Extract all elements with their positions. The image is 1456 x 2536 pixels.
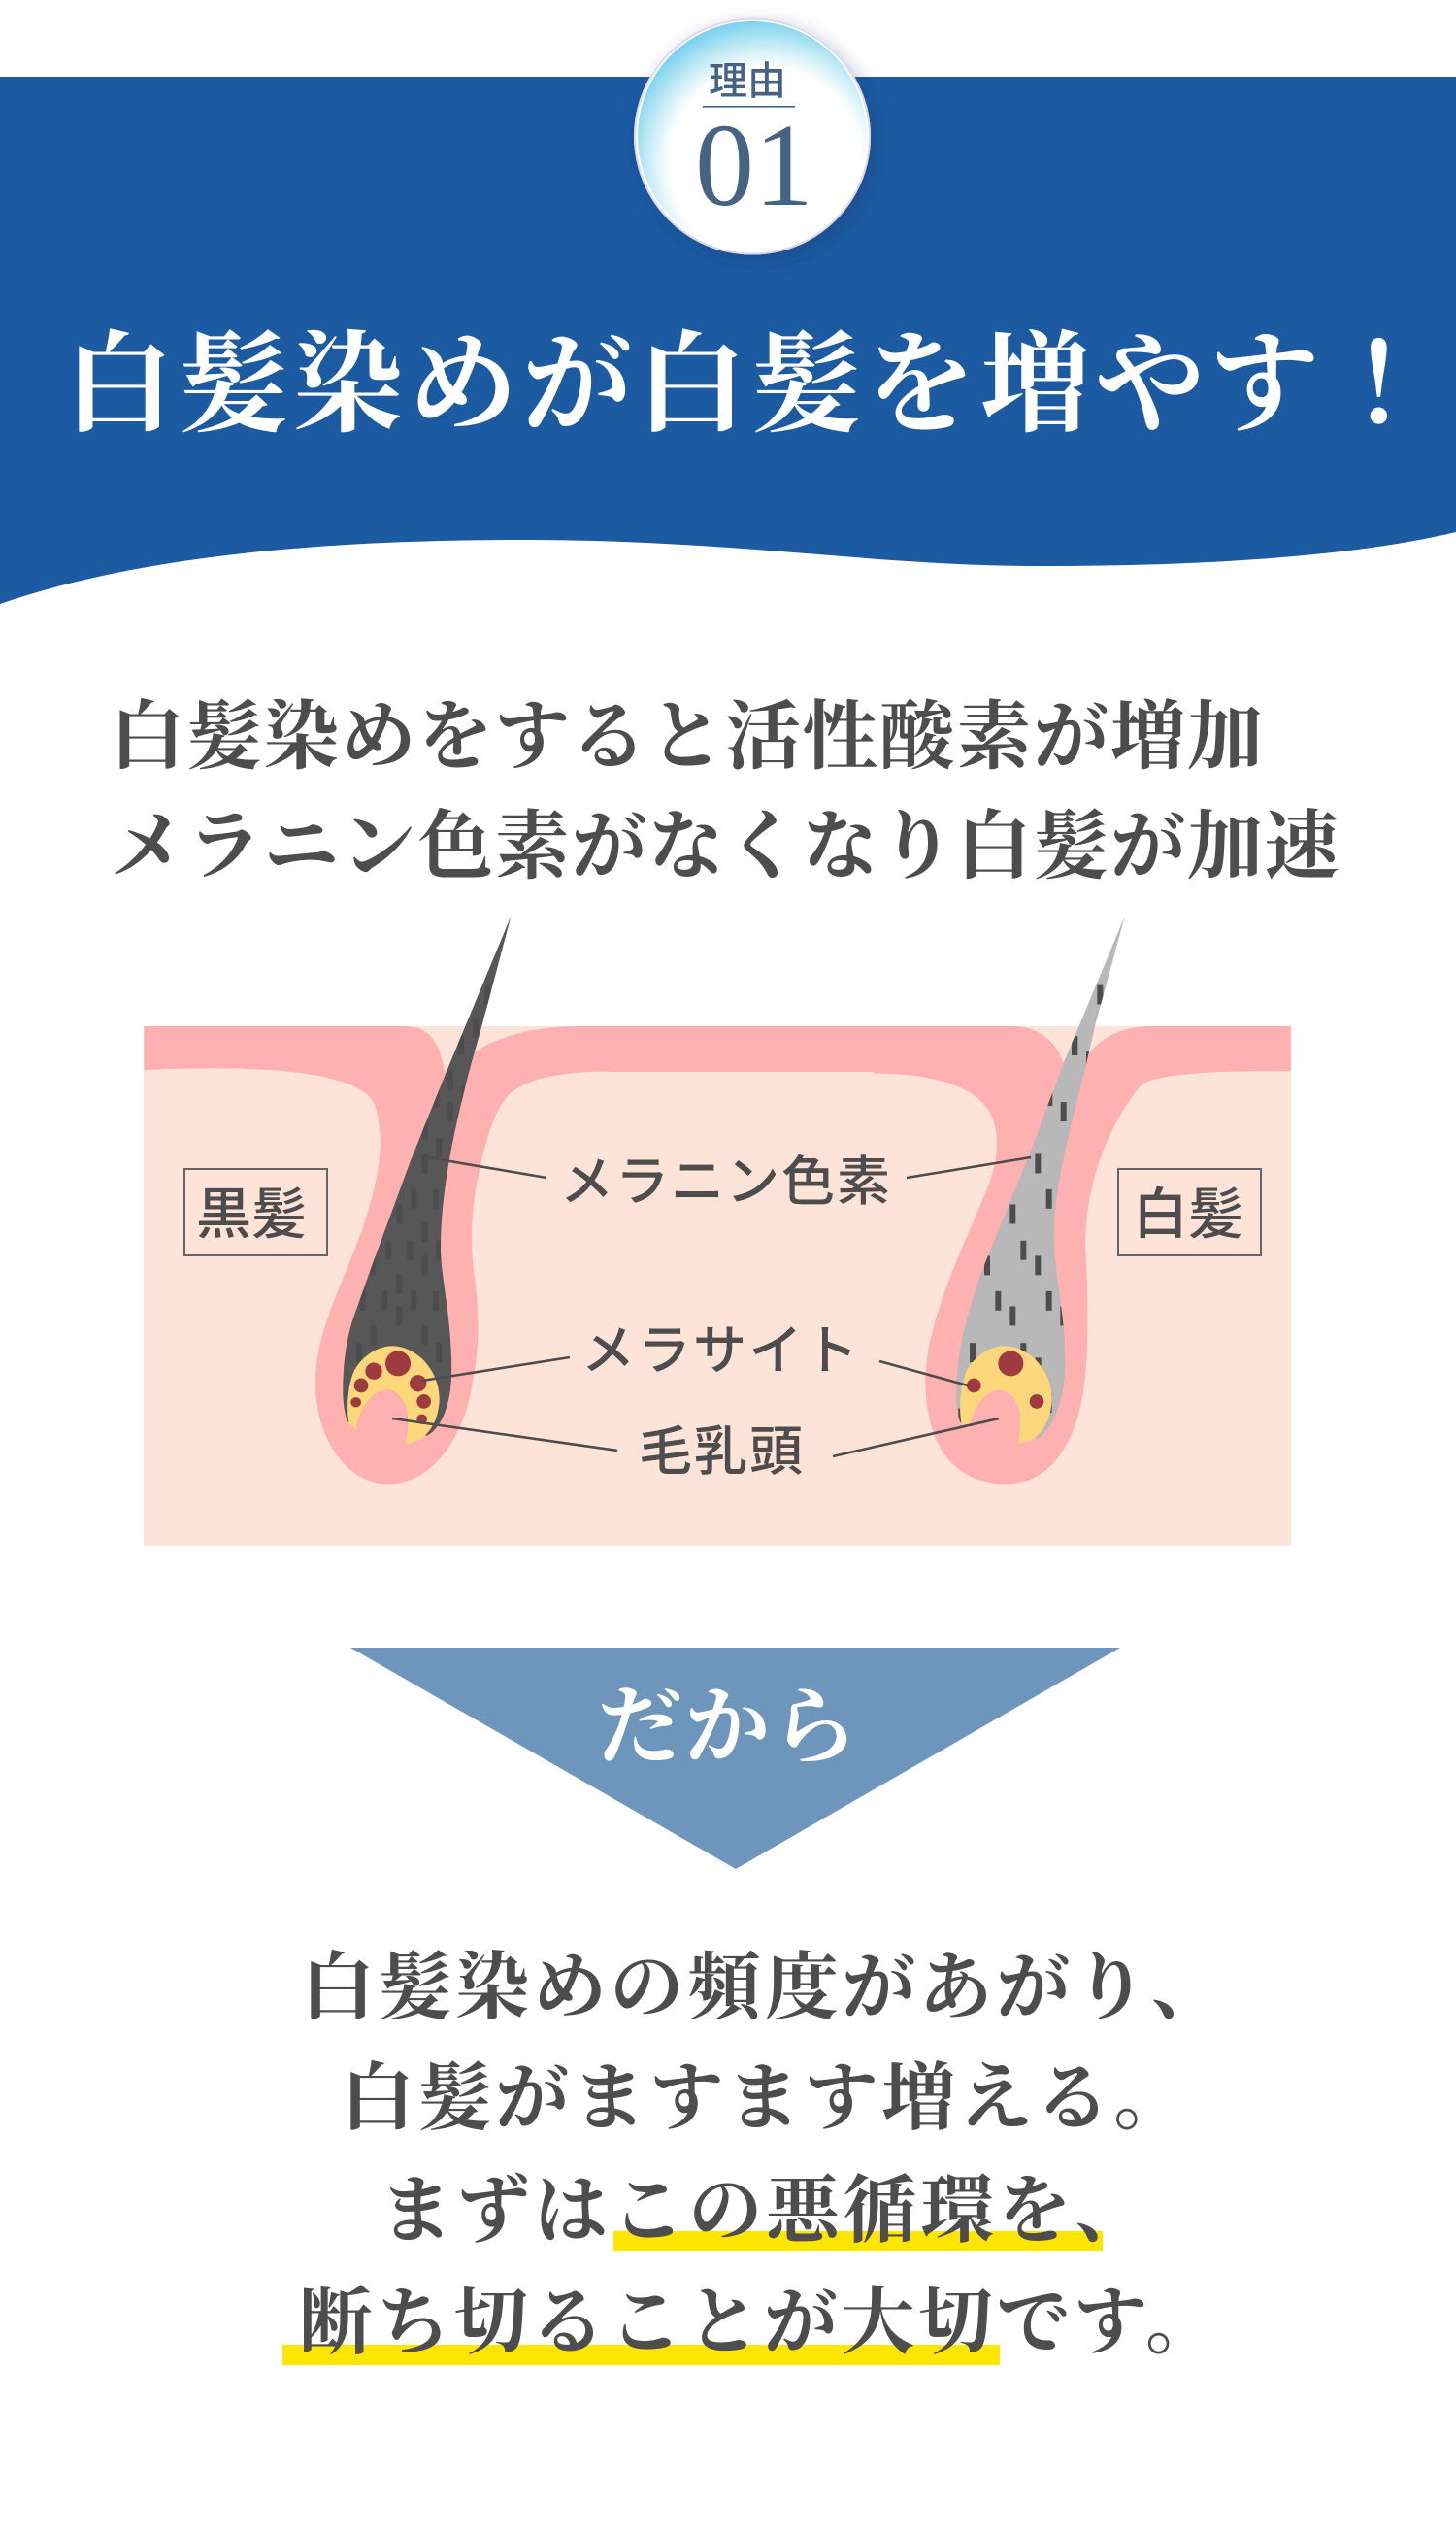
label: melanocyte: メラサイト xyxy=(581,1320,861,1381)
subheading: メラニン色素がなくなり白髪が加速 xyxy=(110,805,1341,888)
arrow: therefore xyxy=(350,1648,1120,1869)
subheading xyxy=(110,695,1341,888)
label: dermal papilla: 毛乳頭 xyxy=(639,1421,805,1482)
label: white hair xyxy=(1118,1169,1261,1255)
conclusion text: 白髪染めの頻度があがり、 xyxy=(301,1948,1228,2029)
conclusion text xyxy=(299,1948,1228,2364)
conclusion text: まずはこの悪循環を、 xyxy=(380,2171,1152,2252)
subheading: 白髪染めをすると活性酸素が増加 xyxy=(110,695,1265,779)
title: 白髪染めが白髪を増やす！ xyxy=(64,325,1439,447)
badge: reason 01 xyxy=(634,17,871,254)
leader lines xyxy=(392,1157,1031,1456)
header band xyxy=(0,77,1456,604)
badge number: 01 xyxy=(695,100,813,231)
conclusion text: 断ち切ることが大切です。 xyxy=(299,2283,1223,2364)
label: melanin pigment: メラニン色素 xyxy=(560,1151,892,1212)
skin panel xyxy=(144,1026,1291,1546)
diagram: hair follicle comparison xyxy=(144,916,1291,1546)
label: black hair: 黒髪 xyxy=(196,1184,307,1246)
black hair follicle xyxy=(144,916,612,1484)
arrow: therefore: だから xyxy=(597,1682,859,1776)
badge label: 理由 xyxy=(709,60,786,103)
conclusion text: 白髪がますます増える。 xyxy=(341,2058,1191,2140)
highlight: cut off xyxy=(282,2345,1000,2365)
label: white hair: 白髪 xyxy=(1133,1184,1243,1246)
white hair follicle xyxy=(874,916,1291,1484)
highlight: vicious cycle xyxy=(613,2231,1103,2251)
label: black hair xyxy=(184,1169,327,1255)
